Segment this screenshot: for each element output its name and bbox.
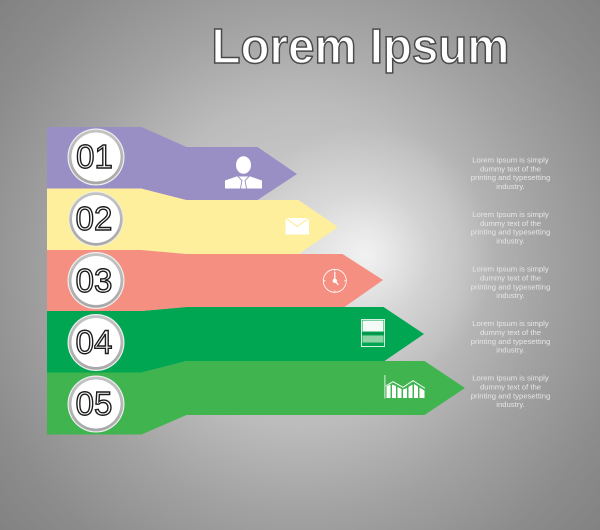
text block 2: dummy text of the: [480, 219, 541, 228]
text block 5: [471, 373, 550, 409]
badge 05: 05: [76, 385, 112, 422]
badge 04: 04: [76, 324, 112, 360]
text block 5: dummy text of the: [480, 382, 541, 391]
text block 4: industry.: [496, 346, 525, 355]
text block 5: Lorem Ipsum is simply: [472, 373, 549, 382]
text block 4: Lorem Ipsum is simply: [472, 319, 549, 328]
badge 03: [68, 252, 124, 309]
icon: clock: [323, 269, 346, 292]
text block 4: [471, 319, 550, 355]
arrow 02: yellow: [47, 188, 338, 254]
text block 2: printing and typesetting: [471, 228, 550, 237]
badge 05: [68, 376, 124, 432]
text block 3: [471, 264, 550, 300]
text block 1: printing and typesetting: [471, 173, 550, 182]
icon: envelope: [286, 218, 309, 234]
text block 3: industry.: [496, 291, 525, 300]
text block 3: dummy text of the: [480, 274, 541, 282]
badge 04: [68, 314, 124, 371]
badge 03: 03: [76, 262, 112, 299]
arrow 03: salmon: [47, 250, 383, 311]
text block 5: industry.: [496, 400, 525, 409]
icon: laptop: [362, 320, 384, 346]
text block 3: printing and typesetting: [471, 282, 550, 291]
arrow 04: dark green: [47, 307, 424, 372]
text block 4: printing and typesetting: [471, 337, 550, 346]
text block 4: dummy text of the: [480, 328, 541, 337]
text block 5: printing and typesetting: [471, 391, 550, 400]
text block 1: industry.: [496, 182, 525, 191]
badge 01: 01: [76, 138, 113, 175]
text block 1: [471, 155, 550, 191]
arrow 05: green: [47, 361, 465, 434]
text block 1: Lorem Ipsum is simply: [472, 155, 549, 164]
text block 2: Lorem Ipsum is simply: [472, 210, 549, 219]
icon: chart: [384, 375, 425, 398]
arrow 01: purple: [47, 127, 297, 200]
text block 1: dummy text of the: [480, 164, 541, 173]
badge 02: [68, 192, 124, 246]
icon: person: [225, 156, 262, 188]
badge 02: 02: [76, 200, 112, 237]
text block 3: Lorem Ipsum is simply: [472, 264, 549, 274]
text block 2: industry.: [496, 236, 525, 246]
badge 01: [68, 128, 124, 186]
title: Lorem Ipsum: [212, 20, 510, 74]
text block 2: [471, 210, 550, 246]
